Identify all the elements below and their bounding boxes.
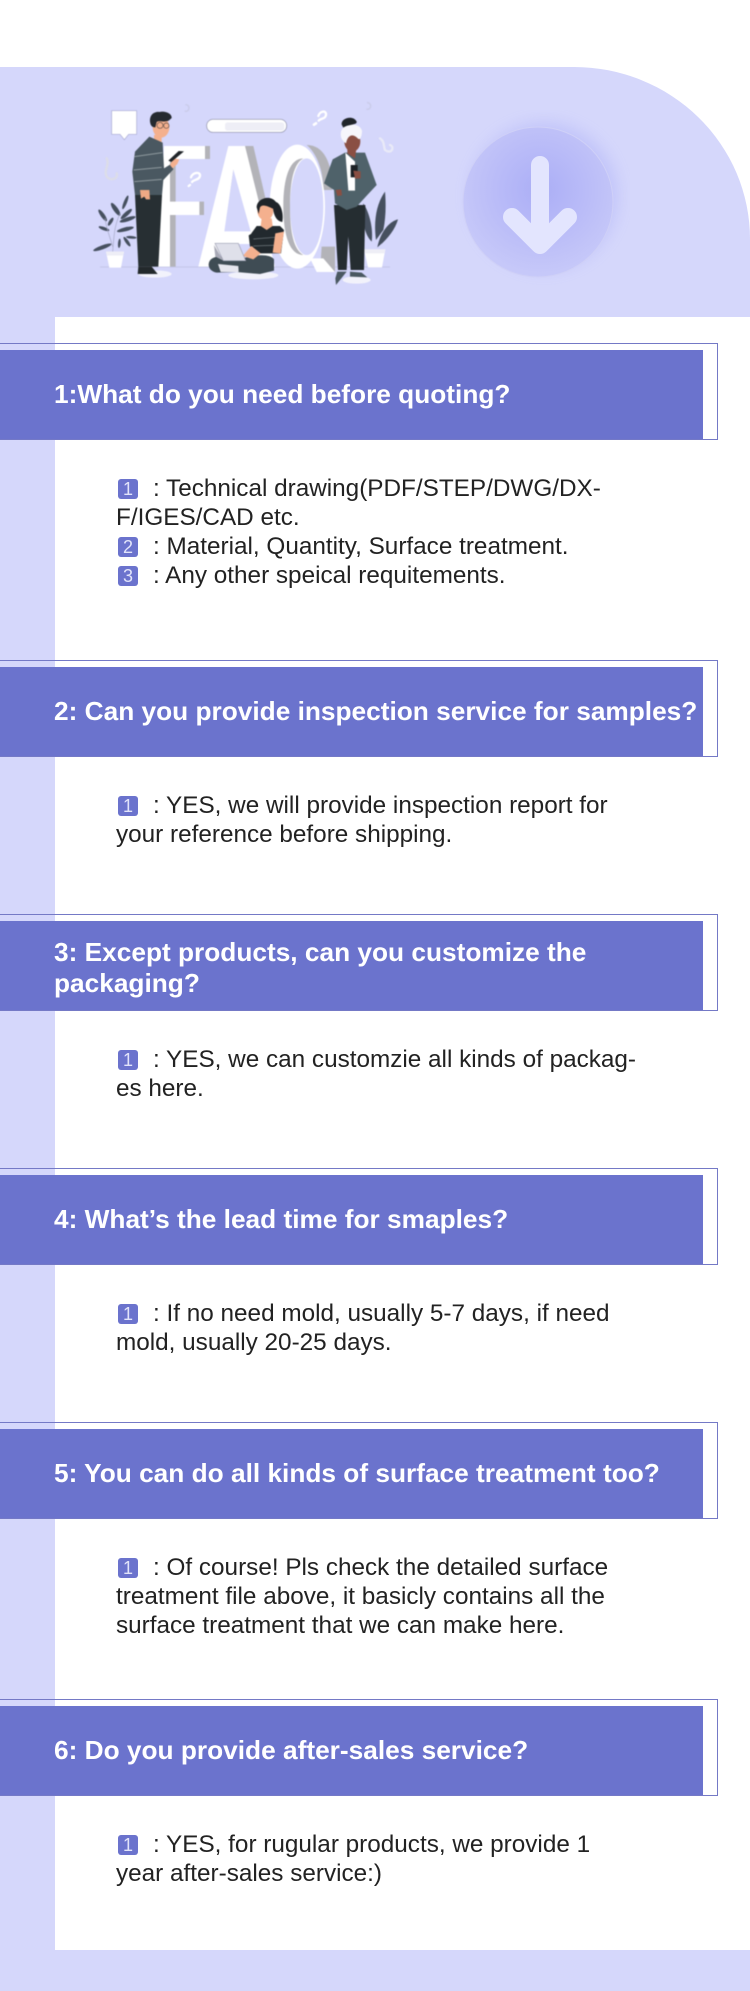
panel: FAQ 2 (0, 660, 718, 848)
heading 3: 3: Except products, can you customize the (54, 937, 586, 967)
answer 3: 1 (123, 1050, 133, 1070)
answer 6: 1 (123, 1834, 133, 1854)
heading 6: 6: Do you provide after-sales service? (54, 1735, 528, 1765)
heading 2 (0, 667, 703, 756)
answer 4 (116, 1300, 610, 1356)
left plant (93, 195, 137, 268)
heading 4 (0, 1175, 703, 1264)
heading 4: 4: What’s the lead time for smaples? (54, 1204, 508, 1234)
answer 5: surface treatment that we can make here. (116, 1612, 564, 1638)
answer 2: : YES, we will provide inspection report for (153, 792, 608, 818)
answer 3: : YES, we can customzie all kinds of packag- (153, 1046, 636, 1072)
answer 4: 1 (123, 1304, 133, 1324)
answer 2 (116, 792, 608, 848)
answer 1: : Material, Quantity, Surface treatment. (153, 532, 568, 560)
search bar (207, 119, 287, 132)
answer 5: treatment file above, it basicly contains all the (116, 1582, 605, 1610)
heading 1: 1:What do you need before quoting? (54, 379, 510, 409)
answer 2: your reference before shipping. (116, 820, 452, 848)
heading 3: packaging? (54, 968, 200, 998)
heading 2: 2: Can you provide inspection service for samples? (54, 696, 697, 726)
answer 2: 1 (123, 796, 133, 816)
white content panel (55, 317, 750, 1950)
answer 6 (116, 1830, 590, 1886)
answer 1: 3 (123, 566, 133, 586)
answer 5: : Of course! Pls check the detailed surface (153, 1554, 608, 1580)
seated woman with laptop (209, 198, 284, 274)
letter A (198, 146, 277, 267)
letter F (157, 146, 210, 267)
question marks (106, 103, 392, 186)
panel: FAQ 3 (0, 914, 718, 1102)
speech bubble (112, 111, 137, 140)
panel: FAQ 4 (0, 1168, 718, 1356)
answer 5 (116, 1554, 608, 1638)
heading 6 (0, 1706, 703, 1795)
heading 3 (0, 921, 703, 1010)
answer 4: mold, usually 20-25 days. (116, 1328, 392, 1356)
answer 3 (116, 1046, 636, 1102)
icon: down arrow in frosted circle (464, 121, 619, 276)
standing woman with phone (324, 118, 377, 285)
answer 6: year after-sales service:) (116, 1860, 382, 1886)
answer 5: 1 (123, 1558, 133, 1578)
answer 1 (116, 474, 601, 588)
man with phone (132, 112, 184, 274)
ground line and shadows (100, 267, 390, 284)
heading 1 (0, 350, 703, 439)
panel: FAQ 1 (0, 343, 718, 588)
letter Q (270, 145, 335, 272)
panel: FAQ 6 (0, 1699, 718, 1886)
answer 6: : YES, for rugular products, we provide 1 (153, 1830, 590, 1858)
answer 3: es here. (116, 1074, 204, 1102)
heading 5 (0, 1429, 703, 1518)
answer 4: : If no need mold, usually 5-7 days, if need (153, 1300, 610, 1326)
answer 1: 1 (123, 478, 133, 498)
heading 5: 5: You can do all kinds of surface treatment too? (54, 1458, 660, 1488)
panel: FAQ 5 (0, 1422, 718, 1638)
answer 1: : Technical drawing(PDF/STEP/DWG/DX- (153, 474, 601, 502)
illustration: FAQ letters with three people (92, 102, 398, 286)
right plant (363, 192, 398, 267)
answer 1: : Any other speical requitements. (153, 562, 506, 588)
answer 1: 2 (123, 536, 133, 556)
answer 1: F/IGES/CAD etc. (116, 504, 300, 530)
